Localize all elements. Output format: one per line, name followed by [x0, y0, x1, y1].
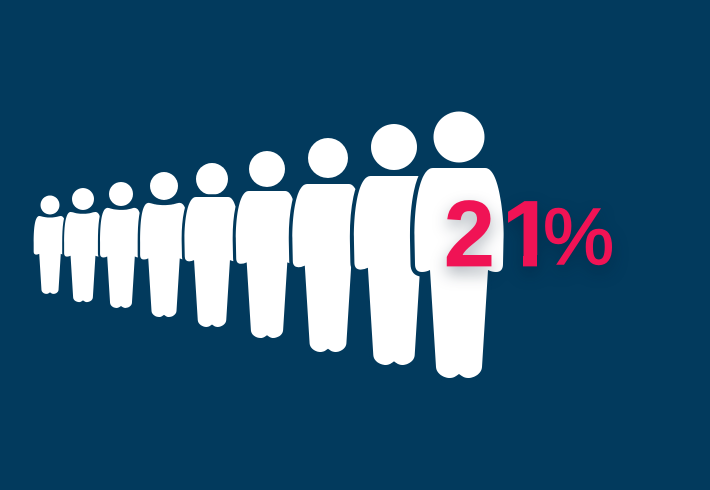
person 3 — [100, 182, 142, 308]
person 7 — [292, 138, 364, 352]
person 5 — [184, 163, 240, 327]
person 1 — [34, 196, 66, 294]
statistic: 21%: 2 — [444, 181, 495, 286]
person 6 — [236, 151, 298, 338]
person 4 — [140, 172, 188, 317]
statistic: 21%: % — [543, 192, 614, 281]
statistic: 21% — [439, 181, 614, 286]
statistic: 21%: 1 — [502, 181, 554, 286]
person 8 — [354, 124, 434, 365]
person 9 — [414, 112, 504, 378]
person 2 — [64, 188, 102, 302]
